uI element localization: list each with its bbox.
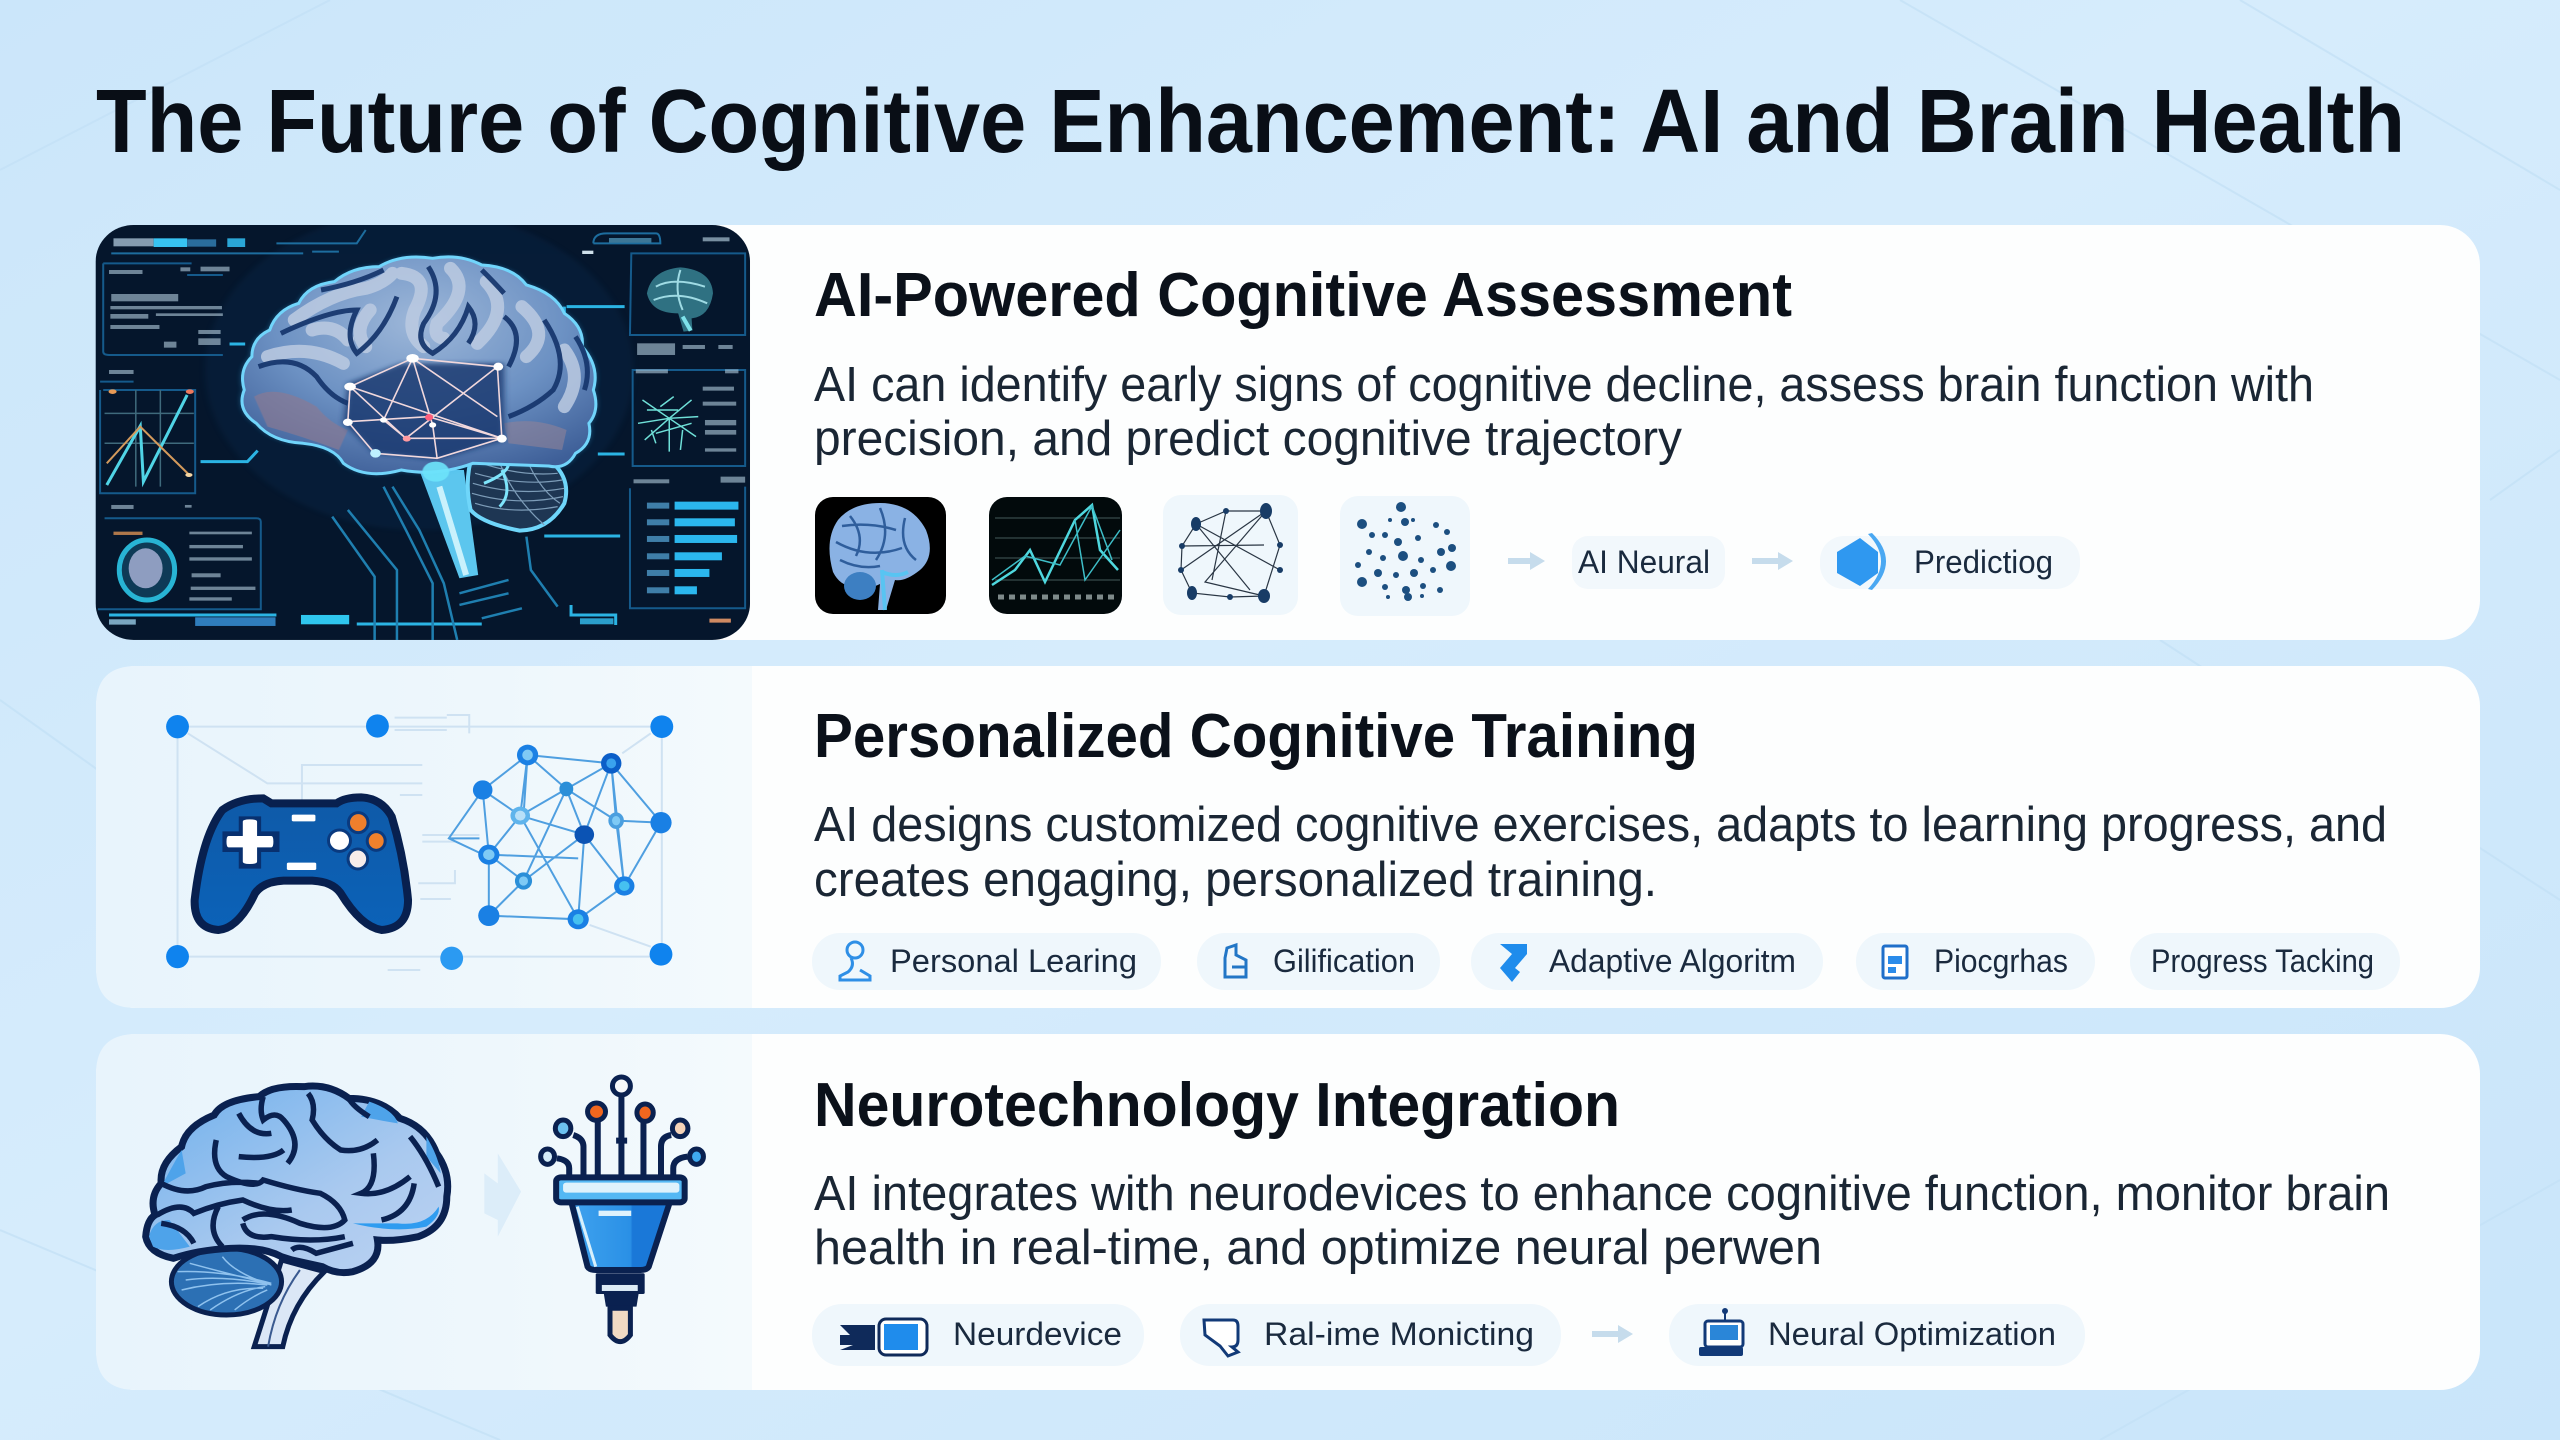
icon: laptop node bbox=[1699, 1308, 1743, 1356]
chip: adaptive algorithm: Adaptive Algoritm bbox=[1549, 943, 1796, 979]
arrow bbox=[1752, 552, 1793, 570]
chip: AI Neural: AI Neural bbox=[1578, 544, 1710, 580]
description: health in real-time, and optimize neural perwen bbox=[814, 1221, 1822, 1275]
frame lines bbox=[178, 715, 662, 970]
brain bbox=[146, 1086, 448, 1273]
description: AI can identify early signs of cognitive decline, assess brain function with bbox=[814, 358, 2314, 412]
chip: neurodevice: Neurdevice bbox=[953, 1316, 1122, 1352]
illustration: game controller and neural network bbox=[166, 714, 673, 970]
panel: neurotechnology integration bbox=[96, 1034, 2480, 1390]
chip: progress tracking: Progress Tacking bbox=[2151, 943, 2374, 979]
heading: Personalized Cognitive Training bbox=[814, 702, 1698, 771]
chip: personal learning bbox=[812, 933, 1161, 990]
icon: dot cluster thumbnail bbox=[1340, 496, 1470, 616]
icon: person bbox=[840, 942, 870, 980]
chip: AI Neural bbox=[1572, 536, 1725, 589]
chip: personal learning: Personal Learing bbox=[890, 943, 1137, 979]
left panels bbox=[98, 253, 745, 609]
heading: AI-Powered Cognitive Assessment bbox=[814, 261, 1792, 330]
neural network bbox=[449, 745, 672, 929]
scan ring bbox=[119, 540, 175, 600]
brain stem bbox=[254, 1260, 324, 1347]
right mini brain bbox=[647, 267, 713, 332]
cerebellum bbox=[171, 1248, 282, 1315]
arrow bbox=[1592, 1325, 1633, 1343]
brain body bbox=[242, 257, 596, 474]
plug body bbox=[556, 1177, 685, 1342]
description: AI designs customized cognitive exercises, adapts to learning progress, and bbox=[814, 798, 2387, 852]
bars bbox=[675, 502, 738, 594]
icon: badge bbox=[1225, 945, 1246, 977]
chip: adaptive algorithm bbox=[1471, 933, 1823, 990]
brain body glow bbox=[242, 257, 596, 474]
panel: AI-powered cognitive assessment bbox=[96, 210, 2480, 640]
heading: Neurotechnology Integration bbox=[814, 1071, 1620, 1140]
chip: progress bbox=[1856, 933, 2095, 990]
icon: monitor bbox=[1204, 1320, 1238, 1356]
illustration: brain scan dashboard bbox=[96, 210, 750, 640]
plug wires bbox=[557, 1097, 688, 1177]
description: precision, and predict cognitive trajectory bbox=[814, 412, 1682, 466]
HUD top bbox=[113, 238, 154, 246]
title: The Future of Cognitive Enhancement: AI and Brain Health bbox=[96, 72, 2405, 172]
chip: neural optimization bbox=[1669, 1304, 2085, 1366]
description: creates engaging, personalized training. bbox=[814, 853, 1657, 907]
icon: network thumbnail bbox=[1163, 495, 1298, 615]
chip: prediction: Predictiog bbox=[1914, 544, 2053, 580]
chip: real-time monitoring bbox=[1180, 1304, 1561, 1366]
chip: progress: Piocgrhas bbox=[1934, 943, 2068, 979]
cerebellum bbox=[468, 448, 566, 531]
chip: gamification bbox=[1197, 933, 1440, 990]
panel: personalized cognitive training bbox=[96, 666, 2480, 1008]
chip: neural optimization: Neural Optimization bbox=[1768, 1316, 2056, 1352]
chip: neurodevice bbox=[812, 1304, 1144, 1366]
controller bbox=[195, 797, 408, 930]
icon: device bbox=[840, 1319, 927, 1355]
neural network overlay bbox=[348, 358, 502, 458]
line chart bbox=[105, 390, 194, 487]
description bbox=[814, 1167, 2390, 1275]
chip: prediction bbox=[1820, 533, 2080, 590]
brain stem bbox=[419, 470, 478, 578]
brain gyri highlights bbox=[267, 268, 574, 407]
icon: brain thumbnail bbox=[815, 497, 946, 614]
description: AI integrates with neurodevices to enhance cognitive function, monitor brain bbox=[814, 1167, 2390, 1221]
icon: document bbox=[1883, 946, 1907, 978]
chip: gamification: Gilification bbox=[1273, 943, 1415, 979]
icon: line chart thumbnail bbox=[989, 497, 1122, 614]
illustration: brain and neural plug bbox=[146, 1077, 703, 1347]
arrow bbox=[1508, 552, 1545, 570]
description bbox=[814, 798, 2387, 907]
transition chevron bbox=[484, 1153, 521, 1237]
icon: hexagon shield bbox=[1837, 533, 1886, 590]
chip: progress tracking bbox=[2130, 933, 2400, 990]
chip: real-time monitoring: Ral-ime Monicting bbox=[1264, 1316, 1534, 1352]
bottom HUD bbox=[109, 619, 136, 625]
icon: adaptive arrow bbox=[1500, 944, 1527, 982]
description bbox=[814, 358, 2314, 466]
